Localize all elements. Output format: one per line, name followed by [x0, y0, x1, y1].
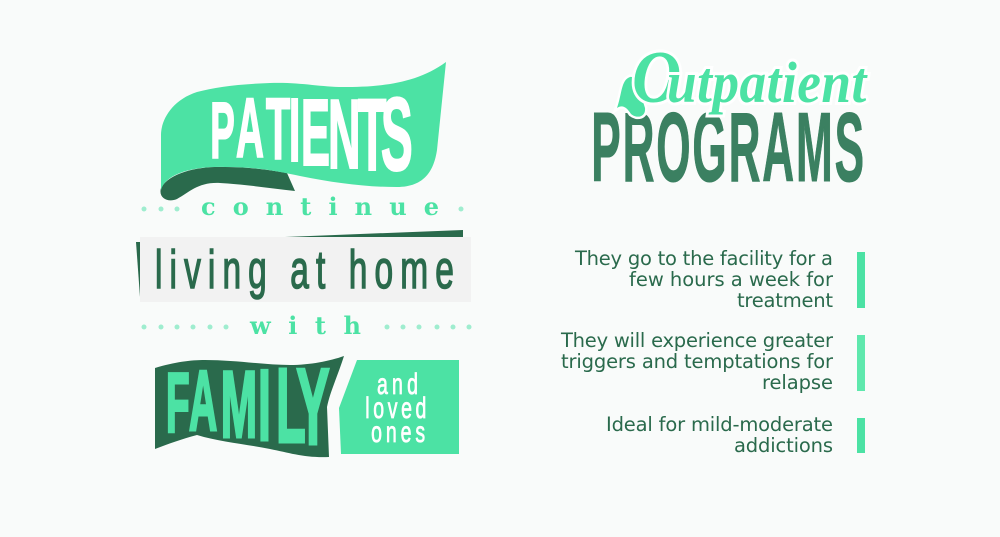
- banner: living at home: [136, 230, 471, 302]
- title word: Outpatient: [617, 37, 868, 119]
- text block: bullet one: They go to the facility for a: [574, 247, 833, 270]
- heading word: FAMILY: M: [221, 351, 257, 458]
- dot: continue right: [458, 206, 464, 212]
- left dark sliver: [136, 242, 140, 297]
- top dark sliver: [285, 230, 463, 237]
- bar: bullet three marker: [857, 418, 865, 453]
- banner: patients ribbon: [160, 62, 446, 200]
- text block: bullet three: Ideal for mild-moderate: [606, 413, 833, 436]
- title word: Outpatient: O: [632, 37, 681, 119]
- heading word: PATIENTS: A: [236, 81, 264, 175]
- word: continue: continue: [201, 192, 439, 221]
- icon: script swash: [617, 77, 645, 117]
- bar: bullet two marker: [857, 335, 865, 391]
- text: and loved ones: and: [377, 368, 418, 401]
- dots row: with right: [384, 324, 472, 330]
- text: and loved ones: ones: [371, 416, 425, 449]
- heading word: PATIENTS: P: [210, 87, 235, 176]
- dots row: continue left: [142, 206, 180, 212]
- heading word: PATIENTS: T: [358, 77, 387, 192]
- word: with: with: [249, 311, 361, 340]
- ribbon body: [155, 356, 344, 457]
- box: and loved ones: [339, 360, 459, 454]
- box shape: [339, 360, 459, 454]
- heading word: PATIENTS: T: [266, 82, 290, 178]
- ribbon body: [161, 62, 446, 190]
- text: and loved ones: loved: [365, 392, 426, 425]
- text block: bullet two: They will experience greater: [560, 329, 834, 352]
- heading word: FAMILY: Y: [296, 345, 330, 467]
- text block: bullet one: few hours a week for: [629, 268, 834, 291]
- text: living at home: living at home: [155, 239, 454, 300]
- text block: bullet two: relapse: [762, 371, 833, 394]
- text block: bullet two: triggers and temptations for: [561, 350, 834, 373]
- title: [591, 37, 868, 203]
- heading word: FAMILY: I: [258, 349, 271, 462]
- heading word: FAMILY: F: [166, 356, 190, 450]
- text block: bullet one: treatment: [737, 289, 833, 312]
- banner: family ribbon: [155, 345, 344, 467]
- heading word: PATIENTS: I: [289, 80, 300, 180]
- bar: bullet one marker: [857, 252, 865, 308]
- ribbon fold shadow: [160, 167, 295, 200]
- dots row: with left: [142, 324, 228, 330]
- panel: left typographic lockup: [136, 62, 472, 467]
- light box: [140, 237, 471, 302]
- heading word: PATIENTS: N: [328, 81, 361, 190]
- title word: Outpatient: utpatient: [667, 51, 868, 116]
- heading word: PATIENTS: E: [301, 79, 330, 186]
- heading word: FAMILY: A: [189, 354, 217, 449]
- heading word: PATIENTS: S: [381, 77, 413, 193]
- heading word: FAMILY: L: [276, 347, 306, 465]
- title word: PROGRAMS: PROGRAMS: [591, 93, 864, 203]
- text block: bullet three: addictions: [734, 434, 833, 457]
